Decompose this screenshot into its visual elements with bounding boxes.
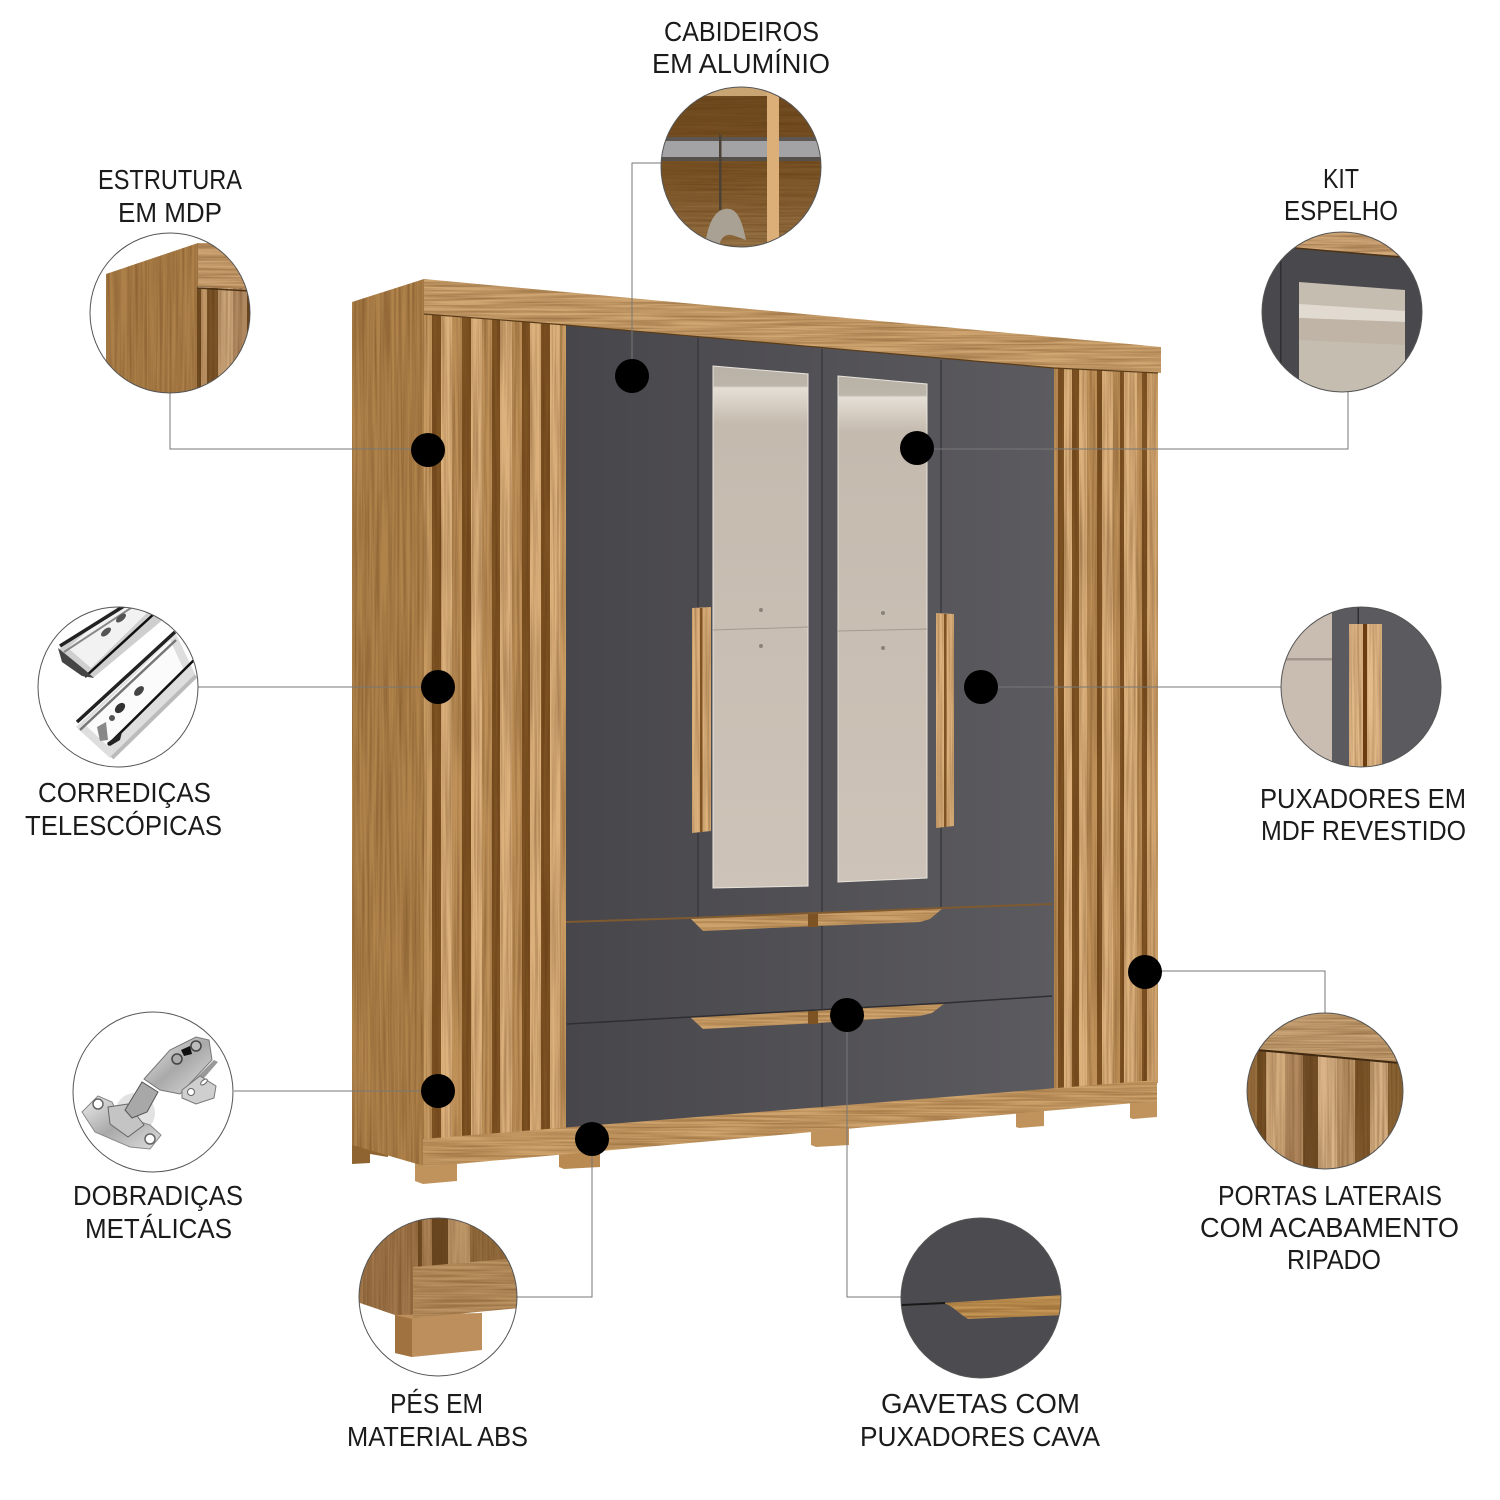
marker dot [411, 433, 445, 467]
label [73, 1180, 243, 1244]
detail circle: foot [355, 1215, 520, 1357]
marker dot [575, 1122, 609, 1156]
detail circle: hinge [81, 1036, 218, 1150]
callout: pés em material ABS [347, 1122, 609, 1452]
label: PUXADORES CAVA [860, 1421, 1100, 1452]
detail circle: clothes rail [660, 86, 822, 252]
callout: corrediças telescópicas [25, 600, 455, 841]
label [1284, 163, 1398, 226]
leader line [198, 686, 438, 688]
detail circle: MDP structure [106, 243, 255, 400]
detail circle: ribbed finish [1248, 1014, 1402, 1168]
lower drawer handle [567, 996, 1052, 1029]
top shadow line [424, 314, 1158, 373]
leader line [170, 393, 428, 449]
left mirror [713, 366, 808, 888]
label: EM MDP [118, 197, 222, 228]
callout: estrutura em MDP [90, 164, 445, 467]
circle outline [1281, 607, 1441, 767]
callout: cabideiros em alumínio [615, 16, 830, 393]
leader line [981, 686, 1281, 688]
label [1260, 783, 1466, 846]
leader line [234, 1090, 438, 1092]
marker dot [900, 431, 934, 465]
circle outline [1262, 232, 1422, 392]
marker dot [830, 998, 864, 1032]
label: KIT [1323, 163, 1359, 194]
callout: gavetas com puxadores cava [830, 998, 1100, 1452]
marker dot [964, 670, 998, 704]
label: PORTAS LATERAIS [1218, 1180, 1442, 1211]
feet [415, 1096, 1157, 1184]
label [25, 777, 222, 841]
label: PUXADORES EM [1260, 783, 1466, 814]
label: TELESCÓPICAS [25, 810, 222, 841]
circle outline [38, 607, 198, 767]
upper drawer handle [566, 904, 1052, 931]
label: ESPELHO [1284, 195, 1398, 226]
detail circle: recessed drawer pull [900, 1217, 1063, 1380]
leader line [1145, 971, 1325, 1013]
circle outline [661, 87, 821, 247]
wardrobe [352, 279, 1161, 1184]
detail circle: telescopic slides [58, 608, 197, 760]
marker dot [1128, 955, 1162, 989]
circle outline [359, 1218, 517, 1376]
circle outline [73, 1012, 233, 1172]
label: CABIDEIROS [664, 16, 819, 47]
callout: portas laterais com acabamento ripado [1128, 955, 1459, 1275]
label: EM ALUMÍNIO [652, 48, 830, 79]
label [98, 164, 242, 228]
label: RIPADO [1287, 1244, 1381, 1275]
circle outline [901, 1218, 1061, 1378]
label: DOBRADIÇAS [73, 1180, 243, 1211]
leader line [632, 163, 661, 376]
callout: puxadores em MDF revestido [964, 606, 1466, 846]
label: PÉS EM [390, 1388, 483, 1419]
label [860, 1388, 1100, 1452]
plinth [423, 1080, 1157, 1167]
right mirror [838, 376, 927, 882]
side panel [352, 279, 424, 1166]
detail circle: door handle [1280, 606, 1444, 770]
label: MATERIAL ABS [347, 1421, 528, 1452]
leader line [847, 1015, 902, 1297]
leader line [516, 1139, 592, 1297]
leader line [917, 391, 1348, 449]
marker dot [421, 1074, 455, 1108]
left ribbed door [423, 300, 566, 1150]
door seams [698, 338, 941, 1107]
label: COM ACABAMENTO [1200, 1212, 1459, 1243]
marker dot [615, 359, 649, 393]
back left foot [352, 1140, 388, 1164]
right door handle [936, 613, 954, 828]
right ribbed door [1053, 360, 1158, 1100]
marker dot [421, 670, 455, 704]
label: GAVETAS COM [881, 1388, 1080, 1419]
circle outline [90, 233, 250, 393]
label: MDF REVESTIDO [1261, 815, 1466, 846]
label [347, 1388, 528, 1452]
detail circle: mirror [1261, 225, 1423, 395]
callout: kit espelho [900, 163, 1423, 465]
left door handle [692, 607, 711, 833]
label: METÁLICAS [85, 1213, 232, 1244]
label [652, 16, 830, 79]
label: ESTRUTURA [98, 164, 242, 195]
circle outline [1247, 1013, 1403, 1169]
callout: dobradiças metálicas [72, 1011, 455, 1244]
label [1200, 1180, 1459, 1275]
top band [424, 279, 1161, 373]
dark doors [566, 323, 1054, 1132]
label: CORREDIÇAS [38, 777, 211, 808]
